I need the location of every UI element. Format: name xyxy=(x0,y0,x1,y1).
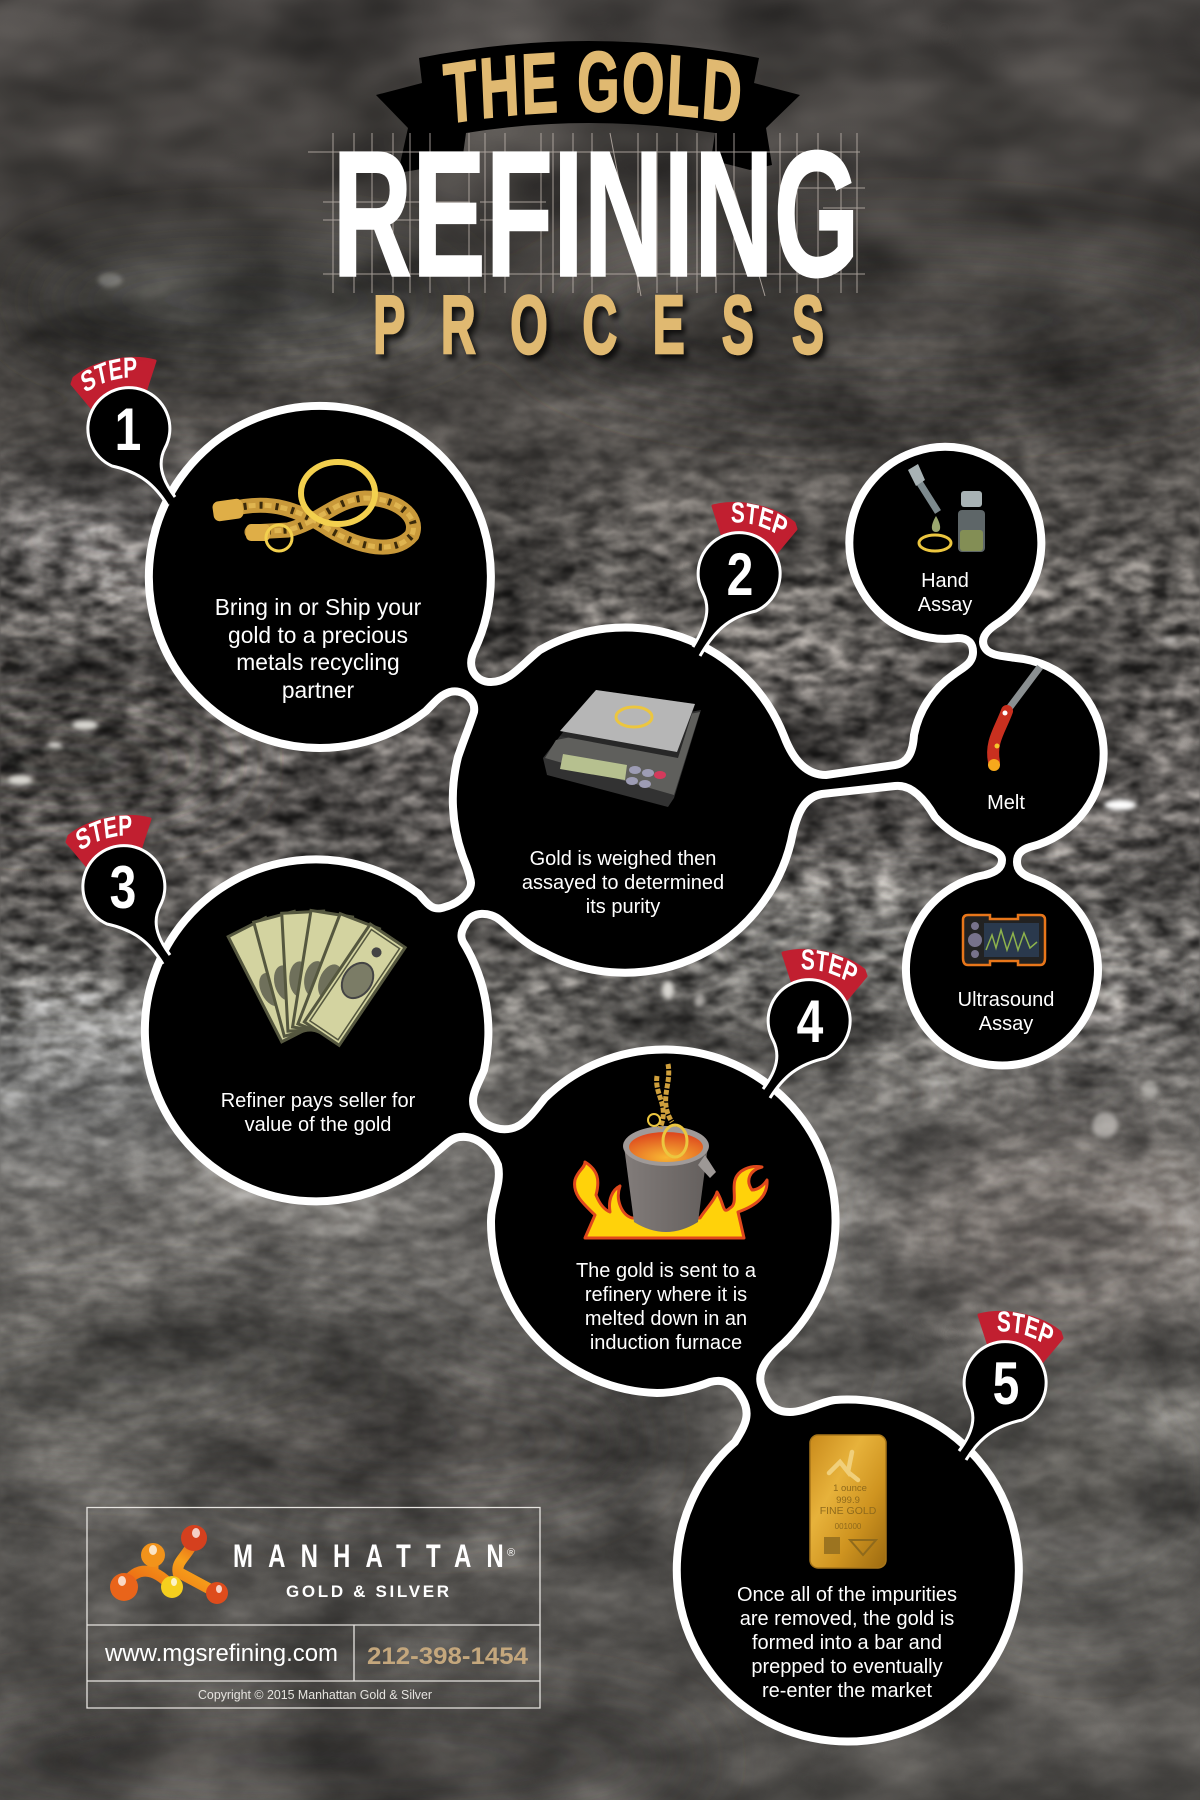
icon: gold chain and rings xyxy=(212,462,414,551)
icon: crucible over flames with gold chain xyxy=(575,1064,767,1238)
text: step 5: are removed, the gold is xyxy=(740,1608,954,1630)
text: step 2: Gold is weighed then xyxy=(530,848,716,870)
step 2 badge: STEP xyxy=(732,502,788,534)
logo mark: molecule xyxy=(110,1525,228,1604)
step 2 badge xyxy=(692,502,798,657)
panel: melt xyxy=(987,667,1040,814)
step 3 badge: STEP xyxy=(76,816,132,849)
text: step 3: Refiner pays seller for xyxy=(221,1090,416,1112)
step 2 badge: 2 xyxy=(727,541,753,608)
icon: one ounce gold bar: FINE GOLD xyxy=(820,1505,877,1517)
text: step 2 xyxy=(522,848,724,918)
text: step 4 xyxy=(576,1260,757,1354)
text: step 4: melted down in an xyxy=(585,1308,747,1330)
company info box xyxy=(87,1508,540,1708)
panel: step 4 xyxy=(573,948,868,1354)
brand name xyxy=(233,1538,515,1601)
panel: step 1 xyxy=(70,356,462,744)
step 1 badge: STEP xyxy=(81,358,172,440)
text: ultrasound assay: Assay xyxy=(979,1013,1033,1035)
text: step 5: formed into a bar and xyxy=(752,1632,942,1654)
text: ultrasound assay: Ultrasound xyxy=(958,989,1054,1011)
text: step 1: gold to a precious xyxy=(228,622,408,648)
text: step 1: partner xyxy=(282,677,355,703)
step 1 badge xyxy=(70,356,176,506)
brand name: ® xyxy=(507,1547,515,1559)
panel: step 3 xyxy=(66,814,456,1176)
icon: one ounce gold bar xyxy=(810,1435,886,1568)
title: PROCESS: PROCESS xyxy=(373,280,824,371)
text: hand assay: Assay xyxy=(918,594,972,616)
text: step 4: refinery where it is xyxy=(585,1284,747,1306)
text: step 2: its purity xyxy=(586,896,660,918)
text: step 1 xyxy=(215,594,422,703)
text: melt: Melt xyxy=(987,792,1025,814)
text: step 2: assayed to determined xyxy=(522,872,724,894)
icon: dropper, ring and bottle xyxy=(908,464,985,552)
panel: step 2 xyxy=(522,502,798,918)
text: step 3: value of the gold xyxy=(245,1114,391,1136)
text: step 5: Once all of the impurities xyxy=(737,1584,957,1606)
icon: one ounce gold bar: 999.9 xyxy=(836,1495,860,1506)
step 3 badge: 3 xyxy=(110,854,136,921)
icon: ultrasound device xyxy=(963,915,1045,965)
title: REFINING: REFINING xyxy=(332,114,860,315)
text: hand assay xyxy=(918,570,972,616)
phone number: 212-398-1454 xyxy=(367,1643,528,1670)
icon: fan of dollar bills xyxy=(228,910,405,1045)
connected black process circles with white outline xyxy=(145,406,1104,1742)
text: step 3 xyxy=(221,1090,416,1136)
icon: one ounce gold bar: 001000 xyxy=(835,1522,862,1531)
step 5 badge: STEP xyxy=(998,1311,1054,1342)
step 5 badge xyxy=(958,1310,1064,1461)
step 4 badge xyxy=(762,948,868,1099)
icon: one ounce gold bar: 1 ounce xyxy=(833,1483,867,1494)
panel: step 5 xyxy=(737,1310,1064,1702)
panel: hand assay xyxy=(908,464,985,616)
text: step 1: metals recycling xyxy=(236,649,400,675)
step 3 badge xyxy=(66,814,172,964)
step 4 badge: STEP xyxy=(802,949,858,980)
text: step 5: re-enter the market xyxy=(762,1680,932,1702)
title blueprint construction lines xyxy=(308,133,865,296)
icon: molten gold on rod xyxy=(988,667,1040,771)
website: www.mgsrefining.com xyxy=(104,1640,338,1667)
text: step 4: The gold is sent to a xyxy=(576,1260,757,1282)
text: hand assay: Hand xyxy=(921,570,969,592)
text: step 5: prepped to eventually xyxy=(751,1656,943,1678)
text: step 5 xyxy=(737,1584,957,1702)
step 1 badge: 1 xyxy=(115,396,141,463)
brand name: MANHATTAN xyxy=(233,1538,504,1574)
copyright: Copyright © 2015 Manhattan Gold & Silver xyxy=(198,1688,432,1702)
icon: digital scale with ring xyxy=(543,690,701,807)
title banner: THE GOLD xyxy=(376,41,800,172)
brand name: GOLD & SILVER xyxy=(286,1582,449,1601)
panel: ultrasound assay xyxy=(958,915,1054,1035)
title banner: THE GOLD: THE GOLD xyxy=(442,50,740,123)
step 5 badge: 5 xyxy=(993,1350,1019,1417)
step 4 badge: 4 xyxy=(797,988,823,1055)
text: step 4: induction furnace xyxy=(590,1332,742,1354)
text: ultrasound assay xyxy=(958,989,1054,1035)
text: step 1: Bring in or Ship your xyxy=(215,594,422,620)
